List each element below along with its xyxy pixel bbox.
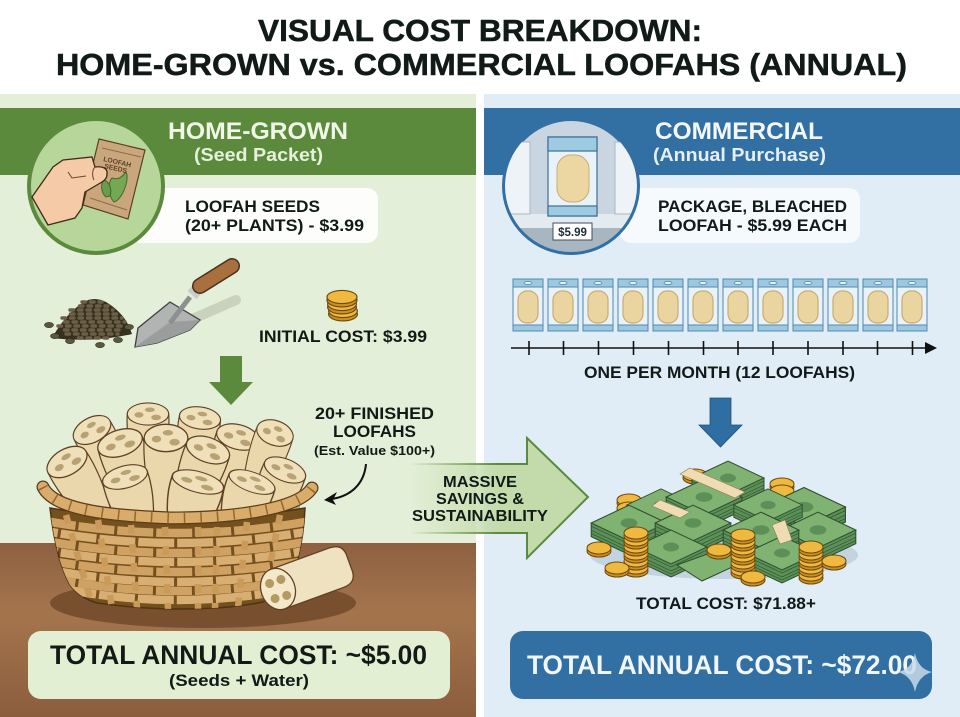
panel: home-grown xyxy=(0,94,476,717)
arrow: massive savings xyxy=(410,438,588,558)
subheading: annual purchase: (Annual Purchase) xyxy=(653,145,826,165)
header band: commercial xyxy=(484,108,960,175)
arrow: massive savings: SUSTAINABILITY xyxy=(412,508,548,525)
heading: home-grown: HOME-GROWN xyxy=(168,118,348,145)
label pill: loofah seeds: (20+ PLANTS) - $3.99 xyxy=(185,216,364,235)
table surface xyxy=(0,543,476,717)
panel: commercial xyxy=(484,94,960,717)
label pill: package: LOOFAH - $5.99 EACH xyxy=(658,216,847,235)
illustration: single loofah slice xyxy=(255,543,357,615)
arrow: massive savings: MASSIVE xyxy=(443,474,517,491)
arrow: curved pointer to basket xyxy=(324,464,366,505)
arrow: massive savings: SAVINGS & xyxy=(436,491,524,508)
label: finished loofahs xyxy=(314,405,435,458)
label pill: package: PACKAGE, BLEACHED xyxy=(658,197,847,216)
label: one per month: ONE PER MONTH (12 LOOFAHS) xyxy=(584,363,855,382)
icon: hand holding seed packet: LOOFAH xyxy=(103,156,132,169)
icon: small coin stack xyxy=(327,290,357,321)
label: initial cost: INITIAL COST: $3.99 xyxy=(259,327,427,346)
title xyxy=(56,13,907,82)
icon: hand holding seed packet: SEEDS xyxy=(104,163,128,175)
label: total cost: TOTAL COST: $71.88+ xyxy=(636,595,816,613)
chart: row of twelve packages xyxy=(513,279,927,331)
icon: sparkle xyxy=(898,653,932,692)
total box: home-grown xyxy=(28,631,450,699)
icon: packaged loofah on shelf xyxy=(498,119,645,258)
total box: commercial xyxy=(510,631,932,699)
icon: packaged loofah on shelf: $5.99 xyxy=(558,227,587,239)
icon: seed pile xyxy=(44,299,134,348)
icon: hand holding seed packet xyxy=(29,119,163,253)
total box: home-grown: (Seeds + Water) xyxy=(169,671,309,690)
label pill: loofah seeds: LOOFAH SEEDS xyxy=(185,197,320,216)
label pill: package xyxy=(620,188,860,243)
label pill: loofah seeds xyxy=(130,188,378,243)
label: finished loofahs: 20+ FINISHED xyxy=(315,405,434,423)
label: finished loofahs: (Est. Value $100+) xyxy=(314,443,435,458)
title: VISUAL COST BREAKDOWN: xyxy=(258,13,702,48)
icon: trowel xyxy=(135,266,236,347)
illustration: pile of money and coins xyxy=(587,461,858,586)
timeline arrow xyxy=(511,341,937,355)
header band: home-grown xyxy=(0,108,476,175)
title: HOME-GROWN vs. COMMERCIAL LOOFAHS (ANNUAL) xyxy=(56,47,907,82)
subheading: seed packet: (Seed Packet) xyxy=(194,145,323,165)
total box: home-grown: TOTAL ANNUAL COST: ~$5.00 xyxy=(50,640,427,670)
total box: commercial: TOTAL ANNUAL COST: ~$72.00 xyxy=(527,650,917,680)
label: finished loofahs: LOOFAHS xyxy=(333,423,416,441)
illustration: basket of loofahs xyxy=(40,403,356,628)
heading: commercial: COMMERCIAL xyxy=(655,118,823,145)
arrow: down blue xyxy=(699,398,742,447)
arrow: down green xyxy=(209,356,253,405)
